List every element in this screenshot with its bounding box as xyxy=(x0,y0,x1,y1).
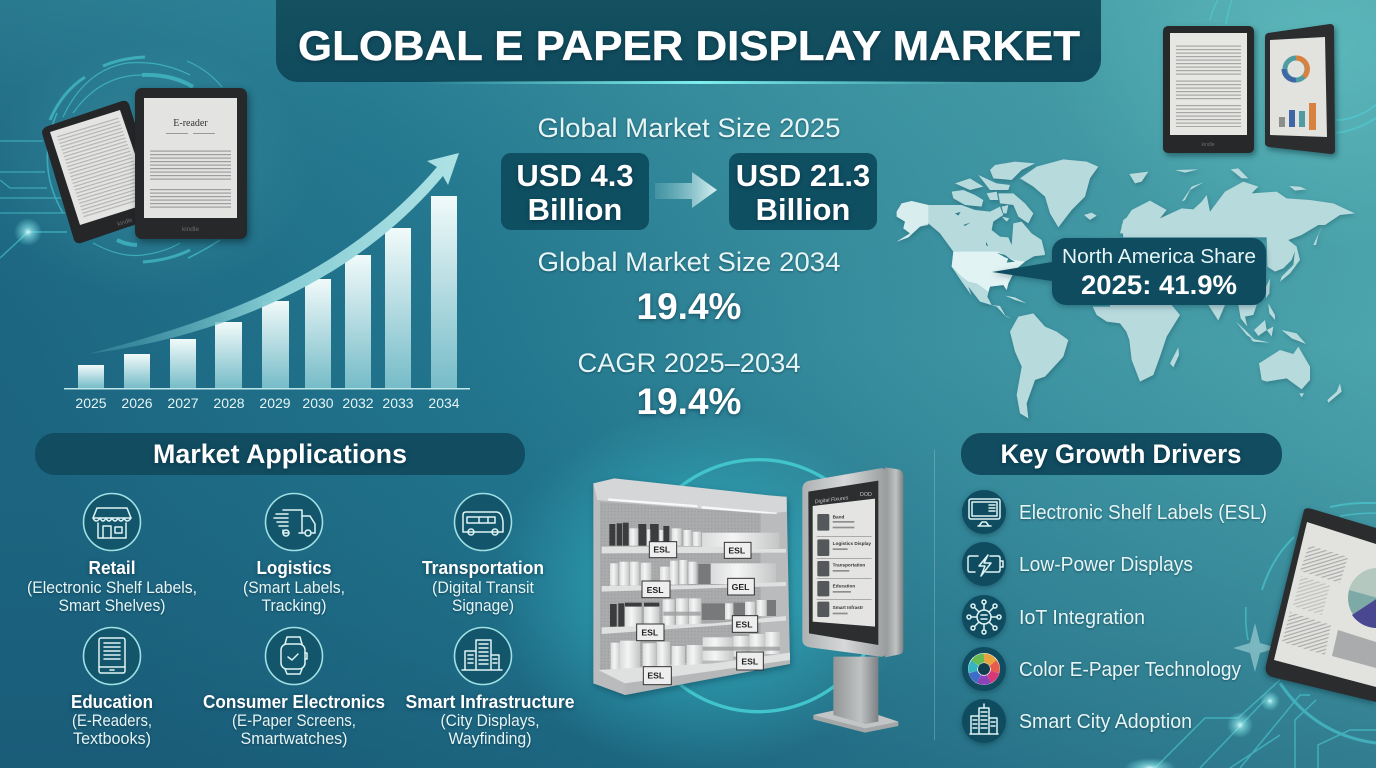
bar chart: market growth xyxy=(64,153,470,411)
icon: tilted e-reader xyxy=(42,101,137,243)
application: smart infrastructure: Wayfinding) xyxy=(448,730,532,748)
circuit and ring decoration: bottom right xyxy=(1124,503,1376,768)
heading pill: key growth drivers: Key Growth Drivers xyxy=(1000,439,1242,469)
ESL tags: ESL xyxy=(647,670,665,680)
heading: market size 2034: Global Market Size 2034 xyxy=(538,247,840,277)
axis labels: 2026 xyxy=(121,395,153,411)
shelves xyxy=(598,547,790,683)
stat: USD 4.3 Billion: Billion xyxy=(528,192,622,227)
ESL tags: ESL xyxy=(653,545,671,555)
illustration: retail shelf and kiosk xyxy=(593,460,903,733)
icon: front e-reader xyxy=(135,88,247,239)
axis labels: 2032 xyxy=(342,395,374,411)
application: education xyxy=(71,628,153,748)
icon: text e-reader: kindle xyxy=(1201,142,1215,148)
axis labels xyxy=(75,395,460,411)
callout: North America share: North America Share xyxy=(1062,245,1256,268)
circuit decoration: top right xyxy=(1210,0,1376,133)
digital kiosk: Transportation xyxy=(833,563,865,568)
title banner xyxy=(276,0,1101,84)
digital kiosk: Band xyxy=(833,514,844,519)
icon: text e-reader xyxy=(1163,26,1254,153)
ESL tags: ESL xyxy=(741,657,759,667)
driver: IoT integration: IoT Integration xyxy=(1019,607,1145,629)
digital kiosk: Smart Infrastr xyxy=(833,605,863,610)
driver: electronic shelf labels: Electronic Shelf Labels (ESL) xyxy=(1019,502,1267,524)
digital kiosk: Logistics Display xyxy=(833,541,871,546)
ESL tags: GEL xyxy=(732,582,750,592)
arrow: growth trend xyxy=(88,153,459,354)
application: consumer electronics: Smartwatches) xyxy=(240,730,348,748)
application: transportation: Transportation xyxy=(422,558,544,578)
application: transportation: (Digital Transit xyxy=(432,579,534,597)
map: highlighted North America xyxy=(897,201,1025,292)
application: retail: Smart Shelves) xyxy=(58,597,166,615)
icon: front e-reader: kindle xyxy=(182,226,199,233)
icon: chart tablet xyxy=(1265,24,1335,154)
driver: smart city adoption: Smart City Adoption xyxy=(1019,711,1192,733)
divider xyxy=(934,450,935,740)
stat: USD 21.3 Billion: USD 21.3 xyxy=(736,158,870,193)
application: consumer electronics: Consumer Electronics xyxy=(203,692,385,712)
application: transportation: Signage) xyxy=(452,597,514,615)
callout: North America share xyxy=(992,238,1266,305)
digital kiosk: DOD xyxy=(860,492,872,498)
icon: front e-reader: E-reader xyxy=(173,118,208,129)
decorative ring xyxy=(632,460,884,712)
driver: electronic shelf labels xyxy=(962,490,1267,534)
ESL tags xyxy=(637,542,763,685)
driver: low-power displays xyxy=(962,542,1193,586)
driver: IoT integration xyxy=(962,595,1145,639)
application: education: Education xyxy=(71,692,153,712)
axis labels: 2033 xyxy=(382,395,414,411)
icon: tilted e-reader: kindle xyxy=(117,217,134,228)
application: logistics: (Smart Labels, xyxy=(243,579,345,597)
ESL tags: ESL xyxy=(728,545,746,555)
circuit and ring decoration: left xyxy=(0,57,222,262)
illustration: e-readers left xyxy=(42,88,247,243)
application: retail xyxy=(27,494,197,615)
digital kiosk: Education xyxy=(833,584,855,589)
stat: USD 21.3 Billion: Billion xyxy=(756,192,850,227)
application: logistics xyxy=(243,494,345,615)
icon: e-paper tablet xyxy=(1266,508,1376,702)
application: education: (E-Readers, xyxy=(72,712,152,730)
application: consumer electronics xyxy=(203,628,385,748)
panel: key growth drivers xyxy=(962,490,1267,743)
application: retail: Retail xyxy=(88,558,136,578)
application: transportation xyxy=(422,494,544,615)
driver: color e-paper technology: Color E-Paper Technology xyxy=(1019,659,1241,681)
stat: USD 21.3 Billion xyxy=(729,153,877,230)
heading pill: market applications xyxy=(35,433,525,475)
application: retail: (Electronic Shelf Labels, xyxy=(27,579,197,597)
application: logistics: Tracking) xyxy=(262,597,326,615)
driver: low-power displays: Low-Power Displays xyxy=(1019,554,1193,576)
map: lakes xyxy=(955,212,1015,263)
digital kiosk xyxy=(802,467,903,733)
axis labels: 2030 xyxy=(302,395,334,411)
world map xyxy=(897,159,1355,418)
application: education: Textbooks) xyxy=(73,730,151,748)
ESL tags: ESL xyxy=(736,619,753,629)
ESL tags: ESL xyxy=(641,627,659,637)
ESL tags: ESL xyxy=(647,585,664,595)
driver: smart city adoption xyxy=(962,699,1192,743)
heading: CAGR: CAGR 2025–2034 xyxy=(578,348,800,378)
stat: USD 4.3 Billion: USD 4.3 xyxy=(516,158,634,193)
icon: sparkle xyxy=(1233,623,1277,672)
driver: color e-paper technology xyxy=(962,647,1241,691)
callout: North America share: 2025: 41.9% xyxy=(1081,270,1237,300)
digital kiosk: Digital Fixures xyxy=(815,495,849,505)
stat: USD 4.3 Billion xyxy=(501,153,649,230)
map: Eurasia, Africa and Oceania xyxy=(1110,168,1355,403)
arrow: growth to 2034 xyxy=(655,172,717,208)
axis labels: 2027 xyxy=(167,395,199,411)
heading: market size 2025: Global Market Size 2025 xyxy=(538,113,840,143)
stat: CAGR value: 19.4% xyxy=(637,381,741,422)
panel: market applications xyxy=(27,494,574,748)
products xyxy=(609,523,669,627)
heading pill: market applications: Market Applications xyxy=(153,439,407,469)
map: Americas and Greenland xyxy=(897,159,1130,418)
illustration: tablet bottom right xyxy=(1233,508,1376,702)
application: smart infrastructure: Smart Infrastructure xyxy=(406,692,574,712)
illustration: e-reader and tablet top right xyxy=(1163,24,1335,154)
axis labels: 2025 xyxy=(75,395,107,411)
application: consumer electronics: (E-Paper Screens, xyxy=(232,712,356,730)
application: smart infrastructure: (City Displays, xyxy=(440,712,540,730)
retail shelf unit xyxy=(593,478,790,695)
application: smart infrastructure xyxy=(406,628,574,748)
heading pill: key growth drivers xyxy=(961,433,1282,475)
axis labels: 2028 xyxy=(213,395,245,411)
axis labels: 2029 xyxy=(259,395,291,411)
title: GLOBAL E PAPER DISPLAY MARKET xyxy=(298,22,1080,69)
stat: 19.4 percent: 19.4% xyxy=(637,286,741,327)
application: logistics: Logistics xyxy=(256,558,332,578)
axis labels: 2034 xyxy=(428,395,460,411)
